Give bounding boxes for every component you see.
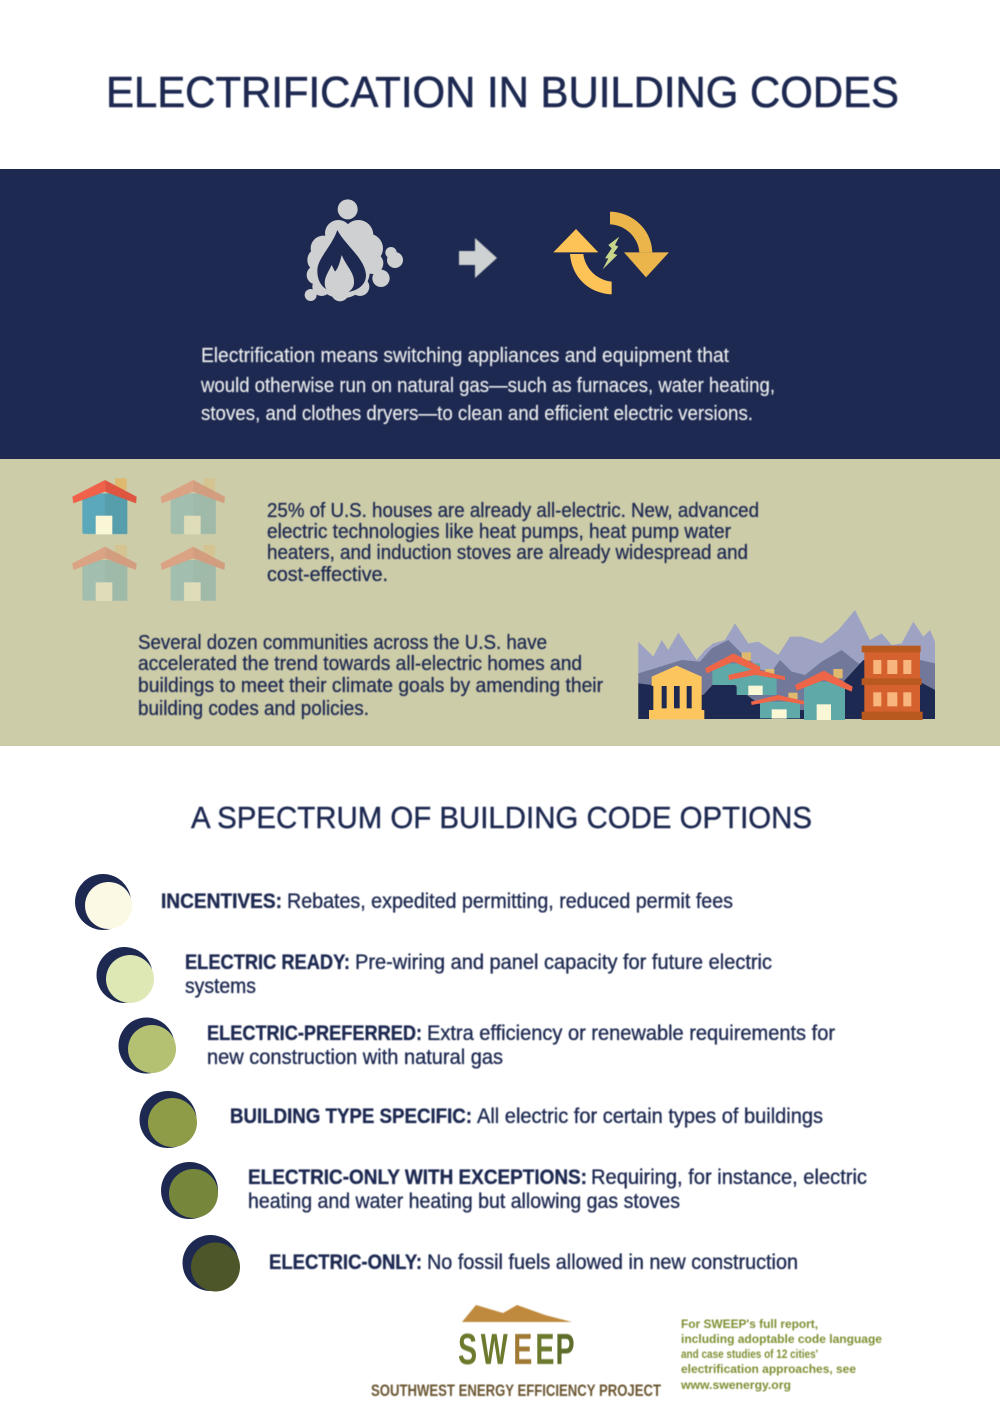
text: communities: buildings to meet their climate goals by amending their bbox=[138, 675, 603, 697]
definition text: stoves, and clothes dryers—to clean and efficient electric versions. bbox=[201, 403, 753, 425]
text: all-electric houses bbox=[267, 500, 759, 586]
option: electric-only: No fossil fuels allowed in new construction bbox=[427, 1251, 798, 1274]
arrow: gas to electric bbox=[459, 238, 497, 278]
option: electric-only with exceptions bbox=[161, 1162, 867, 1219]
option: electric-preferred bbox=[118, 1018, 835, 1074]
text: full report note: electrification approaches, see bbox=[681, 1362, 856, 1376]
definition text: Electrification means switching appliances and equipment that bbox=[201, 345, 729, 367]
option: incentives: INCENTIVES: bbox=[161, 890, 282, 913]
option: electric ready: systems bbox=[185, 975, 256, 998]
panel: electrification definition bbox=[0, 169, 1000, 459]
building: civic temple bbox=[649, 666, 704, 719]
text: all-electric houses: 25% of U.S. houses are already all-electric. New, advanced bbox=[267, 500, 759, 522]
icon: burning gas flame and smoke bbox=[305, 199, 403, 301]
option: electric-only with exceptions: Requiring, for instance, electric bbox=[591, 1166, 867, 1189]
text: all-electric houses: electric technologies like heat pumps, heat pump water bbox=[267, 521, 731, 543]
text: full report note: For SWEEP's full report, bbox=[681, 1317, 818, 1331]
logo: SWEEP bbox=[371, 1305, 661, 1400]
icon: electric cycle arrows bbox=[553, 212, 669, 294]
definition text bbox=[200, 345, 775, 425]
logo: SWEEP: SOUTHWEST ENERGY EFFICIENCY PROJECT bbox=[371, 1381, 661, 1400]
option: electric ready bbox=[96, 947, 772, 1003]
text: all-electric houses: heaters, and induction stoves are already widespread and bbox=[267, 542, 748, 564]
title: ELECTRIFICATION IN BUILDING CODES bbox=[106, 68, 899, 117]
town houses bbox=[705, 652, 853, 720]
text: communities: accelerated the trend towards all-electric homes and bbox=[138, 653, 582, 675]
option: electric ready: Pre-wiring and panel capacity for future electric bbox=[355, 951, 772, 974]
text: all-electric houses: cost-effective. bbox=[267, 564, 388, 586]
option: electric ready: ELECTRIC READY: bbox=[185, 951, 350, 974]
option: electric-only with exceptions: heating and water heating but allowing gas stoves bbox=[248, 1190, 680, 1213]
building: brick apartments bbox=[862, 646, 923, 720]
panel: current adoption bbox=[0, 459, 1000, 746]
text: full report note bbox=[680, 1317, 882, 1392]
option: electric-only: ELECTRIC-ONLY: bbox=[269, 1251, 422, 1274]
option: building type specific: All electric for certain types of buildings bbox=[477, 1105, 823, 1128]
option: electric-preferred: new construction with natural gas bbox=[207, 1046, 503, 1069]
option: incentives: Rebates, expedited permitting, reduced permit fees bbox=[287, 890, 733, 913]
option: building type specific: BUILDING TYPE SPECIFIC: bbox=[230, 1105, 472, 1128]
option: electric-only bbox=[182, 1235, 798, 1292]
text: communities bbox=[138, 632, 603, 720]
option: building type specific bbox=[140, 1091, 823, 1148]
text: full report note: and case studies of 12 cities' bbox=[681, 1347, 818, 1361]
option: electric-only with exceptions: ELECTRIC-ONLY WITH EXCEPTIONS: bbox=[248, 1166, 587, 1189]
text: communities: Several dozen communities across the U.S. have bbox=[138, 632, 547, 654]
heading: spectrum: A SPECTRUM OF BUILDING CODE OPTIONS bbox=[191, 800, 812, 835]
option: incentives bbox=[75, 874, 733, 930]
illustration: town and mountains bbox=[638, 610, 935, 720]
text: communities: building codes and policies. bbox=[138, 698, 369, 720]
definition text: would otherwise run on natural gas—such as furnaces, water heating, bbox=[200, 375, 775, 397]
text: full report note: www.swenergy.org bbox=[680, 1378, 791, 1392]
logo: SWEEP: SWEEP bbox=[458, 1324, 575, 1373]
text: full report note: including adoptable code language bbox=[681, 1332, 882, 1346]
icon: four houses, one highlighted bbox=[72, 478, 225, 601]
option: electric-preferred: Extra efficiency or renewable requirements for bbox=[427, 1022, 835, 1045]
option: electric-preferred: ELECTRIC-PREFERRED: bbox=[207, 1022, 422, 1045]
